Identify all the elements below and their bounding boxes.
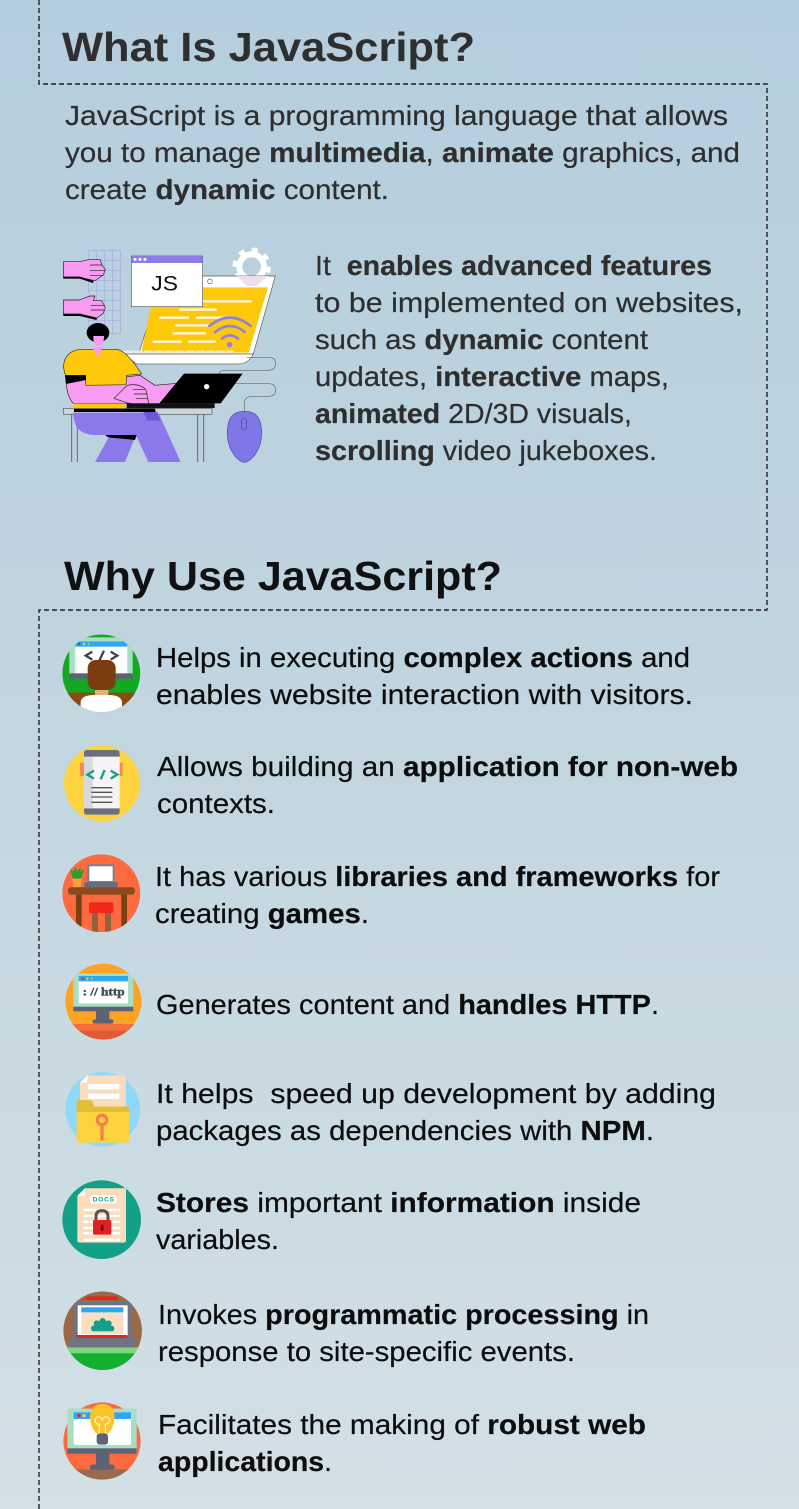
illustration: developer with JS laptop: JS (151, 272, 178, 296)
icon: locked document (62, 1180, 141, 1259)
text: robust web applications: Facilitates the making of robust web (158, 1409, 646, 1440)
intro paragraph: you to manage multimedia , animate graphics, and (65, 137, 740, 168)
text: non-web applications: contexts. (157, 788, 275, 819)
icon: folder with key (65, 1072, 140, 1147)
gear (235, 250, 269, 284)
desk (72, 414, 204, 462)
text: robust web applications: applications. (158, 1446, 332, 1477)
intro paragraph: create dynamic content. (65, 174, 389, 205)
text: programmatic processing: response to site-specific events. (158, 1336, 575, 1367)
icon: light bulb monitor (63, 1402, 141, 1480)
text: complex actions: Helps in executing complex actions and (156, 642, 690, 673)
text: stores information (156, 1187, 641, 1255)
JS window (131, 256, 203, 307)
text: non-web applications: Allows building an application for non-web (157, 751, 738, 782)
heading: What Is JavaScript?: What Is JavaScript? (62, 24, 475, 70)
paragraph: advanced features: updates, interactive maps, (315, 361, 669, 392)
icon: http monitor (63, 964, 143, 1041)
paragraph: advanced features: scrolling video jukeboxes. (315, 435, 657, 466)
laptop screen (139, 276, 275, 354)
icon: mobile code (64, 745, 140, 821)
laptop base (123, 354, 253, 364)
text: NPM packages (156, 1078, 716, 1146)
paragraph: advanced features: It enables advanced features (315, 250, 712, 281)
text: NPM packages: packages as dependencies with NPM. (156, 1115, 654, 1146)
paragraph: advanced features: animated 2D/3D visuals, (315, 398, 632, 429)
text: complex actions (156, 642, 693, 710)
illustration: developer with JS laptop (63, 250, 276, 462)
paragraph: advanced features (315, 250, 743, 466)
text: programmatic processing: Invokes programmatic processing in (158, 1299, 649, 1330)
icon: laptop with gear (63, 1291, 142, 1370)
text: programmatic processing (158, 1299, 649, 1367)
wifi symbol (209, 318, 251, 339)
intro paragraph: JavaScript is a programming language that allows (65, 100, 728, 131)
text: stores information: variables. (156, 1224, 279, 1255)
cable (218, 357, 276, 412)
person (73, 413, 181, 462)
text: robust web applications (158, 1409, 646, 1477)
paragraph: advanced features: to be implemented on websites, (315, 287, 743, 318)
intro paragraph (65, 100, 740, 205)
icon: locked document: DOCS (93, 1197, 115, 1204)
black laptop (159, 374, 243, 403)
text: libraries and frameworks: It has various libraries and frameworks for (155, 861, 720, 892)
text: non-web applications (157, 751, 738, 819)
icon: developer at screen (60, 634, 143, 713)
text: libraries and frameworks: creating games. (155, 898, 369, 929)
text: handles HTTP: Generates content and handles HTTP . (156, 989, 659, 1020)
text: libraries and frameworks (155, 861, 720, 929)
paragraph: advanced features: such as dynamic content (315, 324, 648, 355)
icon: desk with laptop (62, 854, 140, 933)
mouse (227, 411, 262, 462)
icon: http monitor: : // http (83, 987, 125, 999)
keyboard grid (88, 251, 120, 333)
heading: Why Use JavaScript?: Why Use JavaScript? (64, 553, 502, 599)
text: complex actions: enables website interaction with visitors. (156, 679, 693, 710)
text: stores information: Stores important information inside (156, 1187, 641, 1218)
hands (63, 259, 105, 318)
text: NPM packages: It helps speed up development by adding (156, 1078, 716, 1109)
